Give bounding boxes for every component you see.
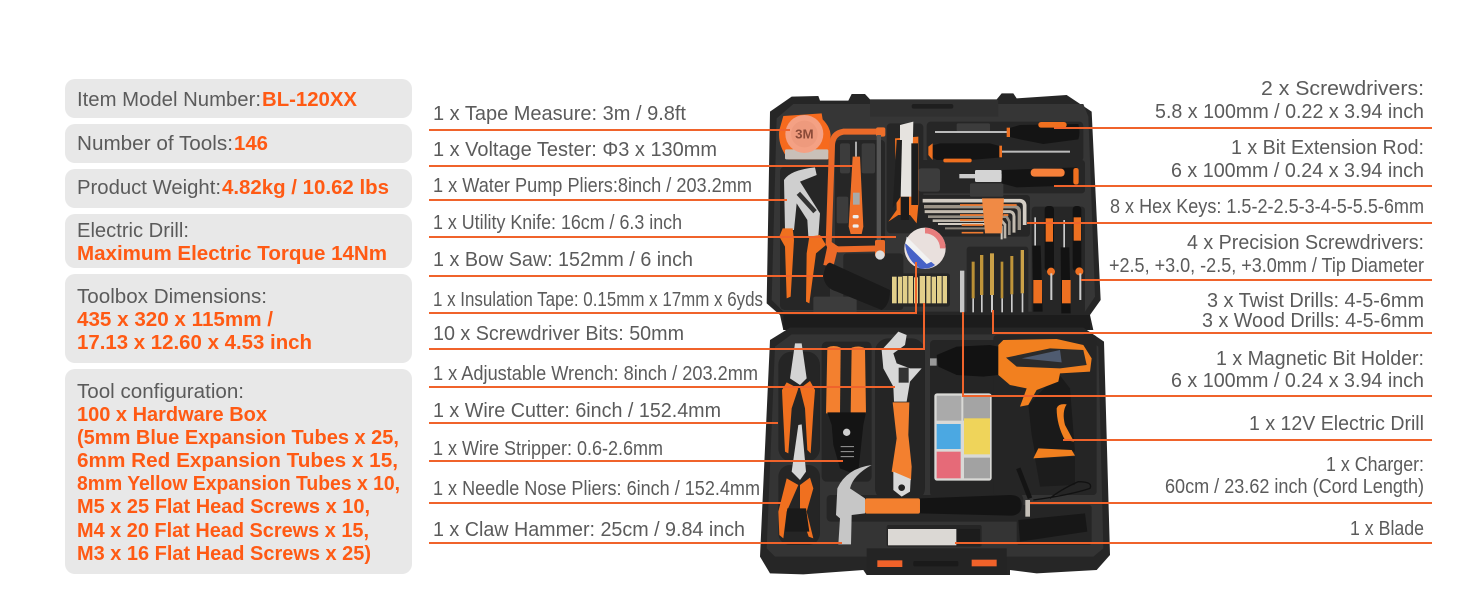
- icon: insulation tape: [904, 228, 946, 269]
- callout: screwdriver bits: [429, 303, 924, 349]
- callout: electric drill: 1 x 12V Electric Drill: [1249, 413, 1424, 435]
- icon: water pump pliers: [779, 167, 826, 303]
- callout: charger: 1 x Charger:: [1326, 454, 1424, 476]
- callout: charger: [1030, 454, 1432, 503]
- callout: screwdrivers: [1054, 78, 1432, 128]
- icon: wire stripper: [826, 346, 866, 472]
- case shell bottom: [760, 328, 1110, 575]
- icon: utility knife: [888, 122, 918, 223]
- callout: insulation tape: 1 x Insulation Tape: 0.15mm x 17mm x 6yds: [433, 289, 763, 311]
- callout: magnetic bit holder: 6 x 100mm / 0.24 x 3.94 inch: [1171, 370, 1424, 392]
- spec: number of tools: Number of Tools:: [77, 133, 233, 155]
- callout: precision screwdrivers: +2.5, +3.0, -2.5, +3.0mm / Tip Diameter: [1109, 255, 1424, 277]
- spec: product weight: 4.82kg / 10.62 lbs: [222, 177, 389, 199]
- callout: water pump pliers: 1 x Water Pump Pliers:8inch / 203.2mm: [433, 175, 752, 197]
- callout: twist and wood drills: [993, 290, 1432, 333]
- icon: screwdrivers: [928, 122, 1079, 187]
- left callouts: [429, 103, 924, 543]
- right callouts: [955, 78, 1432, 543]
- callout: bit extension rod: [1054, 137, 1432, 186]
- tray recesses: [778, 335, 1097, 547]
- icon: tape measure: 3M: [795, 127, 814, 142]
- tray recesses: [780, 122, 1085, 313]
- callout: screwdrivers: 5.8 x 100mm / 0.22 x 3.94 inch: [1155, 101, 1424, 123]
- icon: tape measure: [779, 113, 831, 159]
- icon: charger: [1018, 468, 1091, 542]
- spec: tool configuration: [65, 369, 412, 574]
- callout: insulation tape: [429, 262, 916, 313]
- spec: tool configuration: 100 x Hardware Box: [77, 404, 267, 426]
- callout: screwdrivers: 2 x Screwdrivers:: [1261, 78, 1424, 100]
- callout: screwdriver bits: 10 x Screwdriver Bits: 50mm: [433, 323, 684, 345]
- icon: precision screwdrivers: [1032, 206, 1083, 313]
- icon: bow saw: [823, 127, 890, 310]
- callout: charger: 60cm / 23.62 inch (Cord Length): [1165, 476, 1424, 498]
- icon: hardware box: [934, 393, 992, 481]
- icon: blade: [888, 529, 980, 545]
- spec: toolbox dimensions: Toolbox Dimensions:: [77, 286, 267, 308]
- spec: model number: Item Model Number:: [77, 89, 261, 111]
- spec: product weight: [65, 169, 412, 208]
- callout: wire cutter: 1 x Wire Cutter: 6inch / 152.4mm: [433, 400, 721, 422]
- callout: wire stripper: 1 x Wire Stripper: 0.6-2.6mm: [433, 438, 663, 460]
- spec: model number: BL-120XX: [262, 89, 358, 111]
- spec: electric drill: Electric Drill:: [77, 220, 189, 242]
- spec: tool configuration: M5 x 25 Flat Head Screws x 10,: [77, 496, 370, 518]
- spec: toolbox dimensions: [65, 274, 412, 363]
- spec: electric drill: [65, 214, 412, 268]
- callout: hex keys: 8 x Hex Keys: 1.5-2-2.5-3-4-5-5.5-6mm: [1110, 196, 1424, 218]
- callout: bow saw: 1 x Bow Saw: 152mm / 6 inch: [433, 249, 693, 271]
- toolbox top half: [767, 93, 1101, 330]
- callout: bit extension rod: 6 x 100mm / 0.24 x 3.94 inch: [1171, 160, 1424, 182]
- icon: linesman pliers wire cutter: [782, 343, 815, 453]
- callout: utility knife: 1 x Utility Knife: 16cm / 6.3 inch: [433, 212, 682, 234]
- callout: twist and wood drills: 3 x Twist Drills: 4-5-6mm: [1207, 290, 1424, 312]
- callout: blade: 1 x Blade: [1350, 518, 1424, 540]
- spec: tool configuration: M3 x 16 Flat Head Screws x 25): [77, 543, 371, 565]
- icon: voltage tester: [849, 142, 863, 234]
- spec: toolbox dimensions: 17.13 x 12.60 x 4.53 inch: [77, 332, 312, 354]
- callout: twist and wood drills: 3 x Wood Drills: 4-5-6mm: [1202, 310, 1424, 332]
- spec: tool configuration: Tool configuration:: [77, 381, 244, 403]
- case latches: [877, 560, 997, 567]
- callout: precision screwdrivers: 4 x Precision Screwdrivers:: [1187, 232, 1424, 254]
- icon: electric drill: [930, 339, 1092, 487]
- spec: tool configuration: 6mm Red Expansion Tubes x 15,: [77, 450, 398, 472]
- callout: needle nose pliers: 1 x Needle Nose Pliers: 6inch / 152.4mm: [433, 478, 760, 500]
- spec: product weight: Product Weight:: [77, 177, 221, 199]
- spec: toolbox dimensions: 435 x 320 x 115mm /: [77, 309, 273, 331]
- callout: magnetic bit holder: 1 x Magnetic Bit Holder:: [1216, 348, 1424, 370]
- spec: tool configuration: 8mm Yellow Expansion Tubes x 10,: [77, 473, 400, 495]
- spec: tool configuration: M4 x 20 Flat Head Screws x 15,: [77, 520, 369, 542]
- callout: bit extension rod: 1 x Bit Extension Rod:: [1231, 137, 1424, 159]
- panel: specifications: [65, 79, 412, 574]
- icon: screwdriver bits: [892, 276, 947, 303]
- callout: magnetic bit holder: [963, 312, 1432, 396]
- icon: adjustable wrench: [882, 332, 922, 497]
- spec: tool configuration: (5mm Blue Expansion Tubes x 25,: [77, 427, 399, 449]
- spec: number of tools: 146: [234, 133, 268, 155]
- icon: hex keys: [923, 198, 1025, 239]
- spec: number of tools: [65, 124, 412, 163]
- spec: model number: [65, 79, 412, 118]
- callout: precision screwdrivers: [1081, 232, 1432, 280]
- callout: voltage tester: 1 x Voltage Tester: Φ3 x 130mm: [433, 139, 717, 161]
- case shell top: [767, 93, 1101, 330]
- spec: electric drill: Maximum Electric Torque 14Nm: [77, 243, 387, 265]
- callout: claw hammer: 1 x Claw Hammer: 25cm / 9.84 inch: [433, 519, 745, 541]
- icon: drill bits: [960, 250, 1024, 312]
- callout: adjustable wrench: 1 x Adjustable Wrench: 8inch / 203.2mm: [433, 363, 758, 385]
- icon: needle nose pliers: [778, 424, 813, 538]
- toolbox bottom half: [760, 328, 1110, 575]
- callout: tape measure: 1 x Tape Measure: 3m / 9.8ft: [433, 103, 686, 125]
- icon: claw hammer: [836, 465, 1022, 544]
